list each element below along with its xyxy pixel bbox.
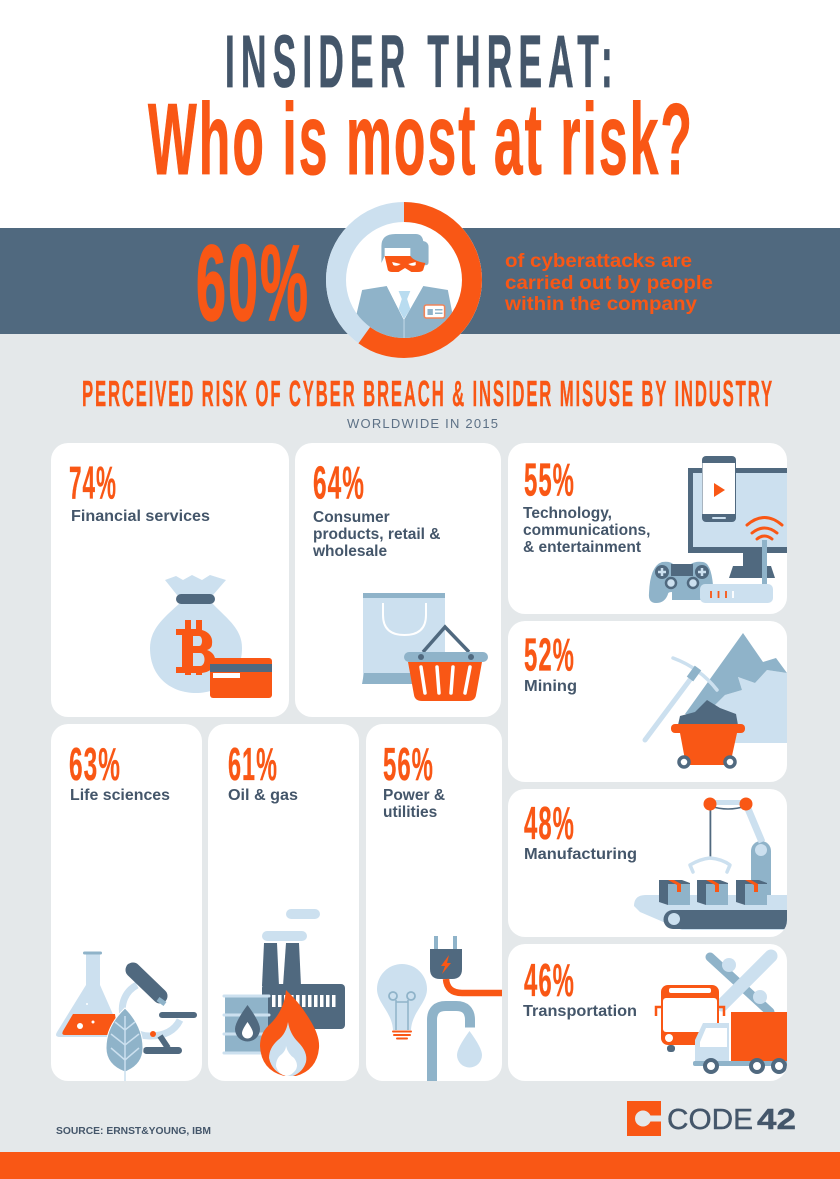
percent: 52%	[524, 628, 575, 680]
callout text	[504, 250, 713, 315]
label: Oil & gas	[228, 787, 298, 804]
label: utilities	[383, 804, 437, 821]
callout text: of cyberattacks are	[505, 250, 692, 272]
icon: devices	[649, 456, 798, 603]
icon: money bag and card	[150, 575, 272, 698]
label: communications,	[523, 522, 650, 539]
callout text: carried out by people	[505, 272, 713, 294]
icon: factory, barrel and flame	[224, 909, 345, 1076]
icon: masked insider	[356, 234, 452, 338]
section subheading: WORLDWIDE IN 2015	[347, 416, 498, 431]
footer bar	[0, 1152, 840, 1179]
panel: consumer products	[295, 443, 501, 717]
panel: oil and gas	[208, 724, 359, 1081]
callout text: within the company	[504, 293, 697, 315]
icon: bulb, plug and tap	[377, 936, 502, 1081]
icon: shopping bag and basket	[362, 593, 488, 701]
logo: Code42	[627, 1101, 796, 1136]
panel: power and utilities	[366, 724, 502, 1081]
source note: SOURCE: ERNST&YOUNG, IBM	[56, 1125, 211, 1137]
label: wholesale	[312, 543, 387, 560]
icon: bus, plane and truck	[656, 956, 791, 1072]
percent: 61%	[228, 738, 278, 790]
label: Power &	[383, 787, 445, 804]
panel: manufacturing	[508, 789, 787, 937]
percent: 48%	[524, 797, 575, 849]
percent: 56%	[383, 738, 434, 790]
panel: mining	[508, 621, 787, 782]
percent: 55%	[524, 454, 575, 506]
percent: 64%	[313, 456, 365, 508]
logo wordmark: CODE	[667, 1104, 753, 1136]
label: Life sciences	[70, 787, 170, 804]
panel: life sciences	[51, 724, 202, 1081]
panel: transportation	[508, 944, 791, 1081]
label: Transportation	[523, 1003, 637, 1020]
label: Manufacturing	[524, 846, 637, 863]
icon: mountain, pick and cart	[645, 633, 787, 767]
banner: 60 percent statistic	[0, 202, 840, 358]
icon: robot arm and conveyor	[634, 798, 787, 930]
donut chart: 60 percent	[326, 202, 482, 358]
label: & entertainment	[523, 539, 641, 556]
percent: 46%	[524, 954, 575, 1006]
logo mark	[627, 1101, 661, 1136]
label: Technology,	[523, 505, 612, 522]
logo wordmark: 42	[757, 1104, 796, 1136]
banner: 60 percent statistic: 60%	[196, 222, 310, 343]
panel: technology	[508, 443, 798, 614]
icon: flask, microscope and leaf	[56, 952, 197, 1081]
panel: financial services	[51, 443, 289, 717]
percent: 63%	[69, 738, 121, 790]
label: Financial services	[71, 508, 210, 525]
label: Mining	[524, 678, 577, 695]
label: products, retail &	[313, 526, 440, 543]
label: Consumer	[313, 509, 390, 526]
panel: financial services: 74%	[69, 456, 117, 508]
